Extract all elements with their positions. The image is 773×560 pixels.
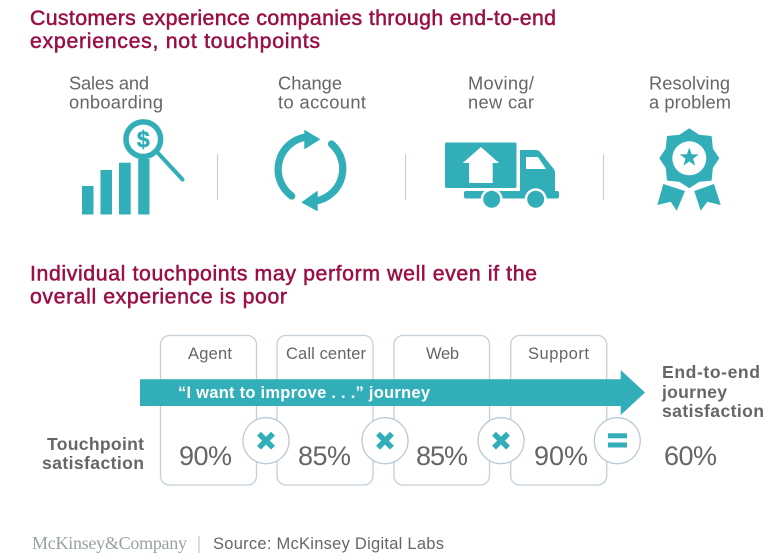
result label: end-to-end journey satisfaction: journey bbox=[661, 382, 727, 402]
arrow: journey bbox=[140, 370, 645, 415]
label: sales and onboarding: Sales and bbox=[69, 72, 149, 94]
card: support: 90% bbox=[534, 441, 588, 471]
label: change to account bbox=[278, 72, 366, 112]
icon: moving truck bbox=[445, 142, 559, 210]
label: resolving a problem: Resolving bbox=[649, 72, 730, 94]
label: change to account: to account bbox=[278, 92, 366, 112]
card: web bbox=[394, 336, 490, 485]
footer: logo and source: McKinsey&Company bbox=[32, 533, 187, 553]
panel: resolving a problem bbox=[649, 72, 731, 211]
operator: multiply 3 bbox=[478, 418, 524, 464]
card: call center bbox=[277, 336, 373, 485]
icon: bar chart with magnifying glass: $ bbox=[137, 126, 150, 152]
label: resolving a problem: a problem bbox=[649, 92, 731, 112]
card: call center: 85% bbox=[298, 441, 351, 471]
card: agent: 90% bbox=[179, 441, 232, 471]
footer: logo and source bbox=[32, 533, 444, 553]
label: sales and onboarding bbox=[69, 72, 163, 112]
card: web: 85% bbox=[416, 441, 468, 471]
heading: touchpoints versus overall bbox=[30, 262, 537, 308]
heading: touchpoints versus overall: overall experience is poor bbox=[30, 284, 287, 308]
result label: end-to-end journey satisfaction bbox=[661, 362, 764, 421]
icon: bar chart with magnifying glass bbox=[82, 122, 182, 214]
heading: end-to-end experiences bbox=[30, 6, 556, 53]
result label: end-to-end journey satisfaction: satisfaction bbox=[662, 401, 764, 421]
operator: multiply 2 bbox=[362, 418, 408, 464]
label: resolving a problem bbox=[649, 72, 731, 112]
card: call center: Call center bbox=[286, 345, 366, 363]
heading: end-to-end experiences: Customers experience companies through end-to-end bbox=[30, 6, 556, 30]
card: agent bbox=[160, 336, 256, 485]
card: support: Support bbox=[528, 345, 589, 363]
label: moving or new car bbox=[468, 72, 535, 112]
card: support bbox=[511, 336, 607, 485]
heading: end-to-end experiences: experiences, not touchpoints bbox=[30, 29, 320, 53]
icon: circular arrows bbox=[278, 130, 343, 210]
card: agent: Agent bbox=[188, 345, 232, 363]
panel: moving or new car bbox=[445, 72, 559, 210]
footer: logo and source: Source: McKinsey Digital Labs bbox=[213, 535, 444, 553]
label: moving or new car: Moving/ bbox=[468, 72, 535, 94]
label: sales and onboarding: onboarding bbox=[69, 92, 163, 112]
icon: award ribbon badge bbox=[657, 128, 721, 211]
heading: touchpoints versus overall: Individual touchpoints may perform well even if the bbox=[30, 262, 537, 286]
row label: touchpoint satisfaction bbox=[42, 434, 144, 473]
label: change to account: Change bbox=[278, 72, 342, 94]
operator: equals bbox=[594, 418, 640, 464]
label: moving or new car: new car bbox=[468, 92, 534, 112]
panel: sales and onboarding bbox=[69, 72, 182, 214]
result value: 60%: 60% bbox=[664, 441, 717, 471]
row label: touchpoint satisfaction: satisfaction bbox=[42, 453, 144, 473]
operator: multiply 1 bbox=[243, 418, 289, 464]
card: web: Web bbox=[426, 345, 459, 363]
row label: touchpoint satisfaction: Touchpoint bbox=[47, 434, 144, 454]
panel: change to account bbox=[278, 72, 366, 210]
result label: end-to-end journey satisfaction: End-to-end bbox=[662, 362, 760, 382]
arrow: journey: “I want to improve . . .” journey bbox=[178, 384, 431, 402]
